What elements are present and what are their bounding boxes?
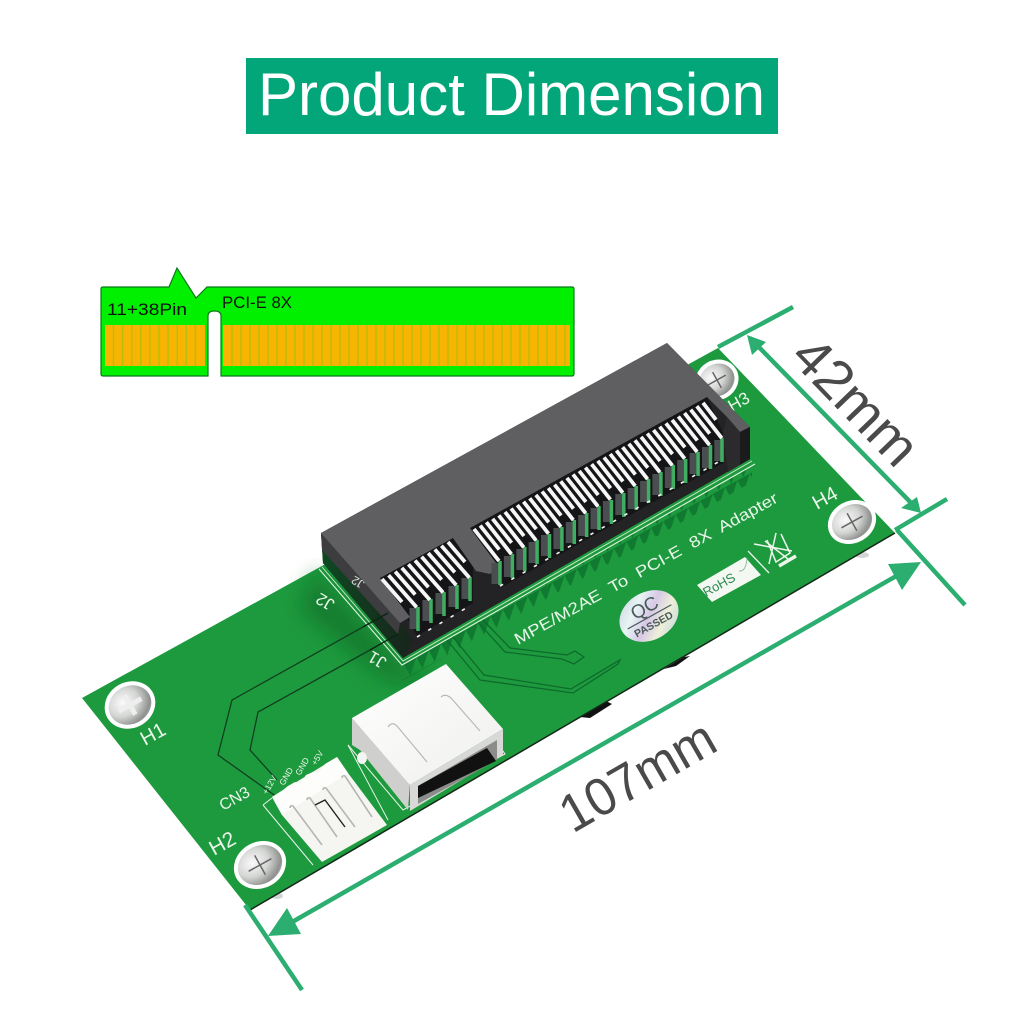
wall reflection marks: J2: [349, 573, 367, 591]
RoHS badge: [697, 557, 761, 602]
white pins, small slot: long: [389, 546, 469, 607]
silk label H2: H2: [205, 827, 240, 860]
screw H1: [96, 672, 164, 738]
dimension: 42mm: [718, 307, 965, 605]
USB opening: [418, 740, 497, 804]
adapter circuit board: [82, 348, 895, 910]
header top rib: [272, 757, 348, 815]
gold finger pinout card: [101, 268, 574, 376]
silk label H4: H4: [809, 483, 842, 514]
board label: adapter name: MPE/M2AE To PCI-E 8X Adapter: [512, 490, 782, 649]
42mm value: 42mm: [780, 324, 932, 478]
RoHS badge: RoHS: [700, 570, 738, 600]
small slot floor: [380, 538, 473, 636]
white pins, long slot: short: [480, 403, 716, 550]
slot label: PCI-E 8X: [222, 294, 292, 312]
silk label H1: H1: [137, 719, 170, 750]
42mm arrow: [747, 335, 921, 513]
USB port: [348, 664, 505, 811]
silk label H3: H3: [725, 388, 753, 415]
white pins, long slot: long: [474, 406, 722, 561]
connector body: [321, 343, 750, 658]
pin tail blocks, small slot: [413, 578, 465, 629]
USB pressed lines: [388, 695, 480, 762]
107mm arrow: [268, 562, 921, 936]
power pin labels: GND: [293, 756, 311, 777]
solder dots: [417, 461, 720, 637]
green pin tails, long slot: [500, 438, 722, 585]
reflected traces: [363, 613, 398, 650]
circuit traces: [218, 620, 620, 797]
USB front: [410, 729, 503, 811]
divider: [748, 551, 769, 573]
green pin tails, small slot: [418, 577, 470, 631]
USB top shell: [352, 664, 503, 785]
gold contacts: long section: [223, 325, 570, 366]
power pin labels: GND: [277, 766, 295, 787]
header body: [272, 757, 387, 862]
silk label CN3: CN3: [217, 784, 253, 814]
4-pin power header: [263, 745, 388, 865]
QC passed sticker: [610, 580, 688, 652]
power pin labels: +5V: [309, 748, 326, 767]
connector top face: [321, 343, 750, 623]
header key slot: [315, 800, 345, 827]
connector base plate edge: [319, 464, 755, 665]
power pin labels: [260, 748, 326, 796]
gold contacts: short section: [105, 325, 205, 366]
underside component slivers: [271, 552, 869, 899]
pin tail blocks, long slot: [495, 440, 718, 584]
silk label J2: J2: [313, 589, 338, 614]
connector shadow on board: [300, 570, 450, 690]
left extension line: [245, 905, 302, 990]
title banner: Product Dimension: [258, 61, 765, 128]
silk label J1: J1: [365, 647, 390, 672]
screw H2: [225, 832, 295, 898]
left side wall: [321, 533, 413, 658]
dimension: 107mm: [245, 562, 921, 990]
USB side: [352, 718, 410, 810]
QC passed sticker: PASSED: [632, 609, 676, 640]
white pins, small slot: short: [382, 542, 465, 602]
extension lines: [718, 307, 965, 605]
QC passed sticker: QC: [627, 592, 662, 625]
right wall: [723, 417, 750, 472]
large slot floor: [470, 397, 723, 587]
PCI-E slot connector: [319, 343, 755, 665]
power pin labels: +12V: [260, 773, 279, 796]
sawtooth connector shadow: [404, 466, 752, 680]
icon: crossed-out bin: [754, 533, 796, 566]
header pin grooves: [290, 776, 372, 845]
pin count label: 11+38Pin: [107, 301, 187, 319]
screw H4: [820, 492, 884, 552]
screw H3: [688, 352, 746, 408]
USB mounting tab: [357, 752, 367, 764]
107mm value: 107mm: [549, 708, 726, 844]
